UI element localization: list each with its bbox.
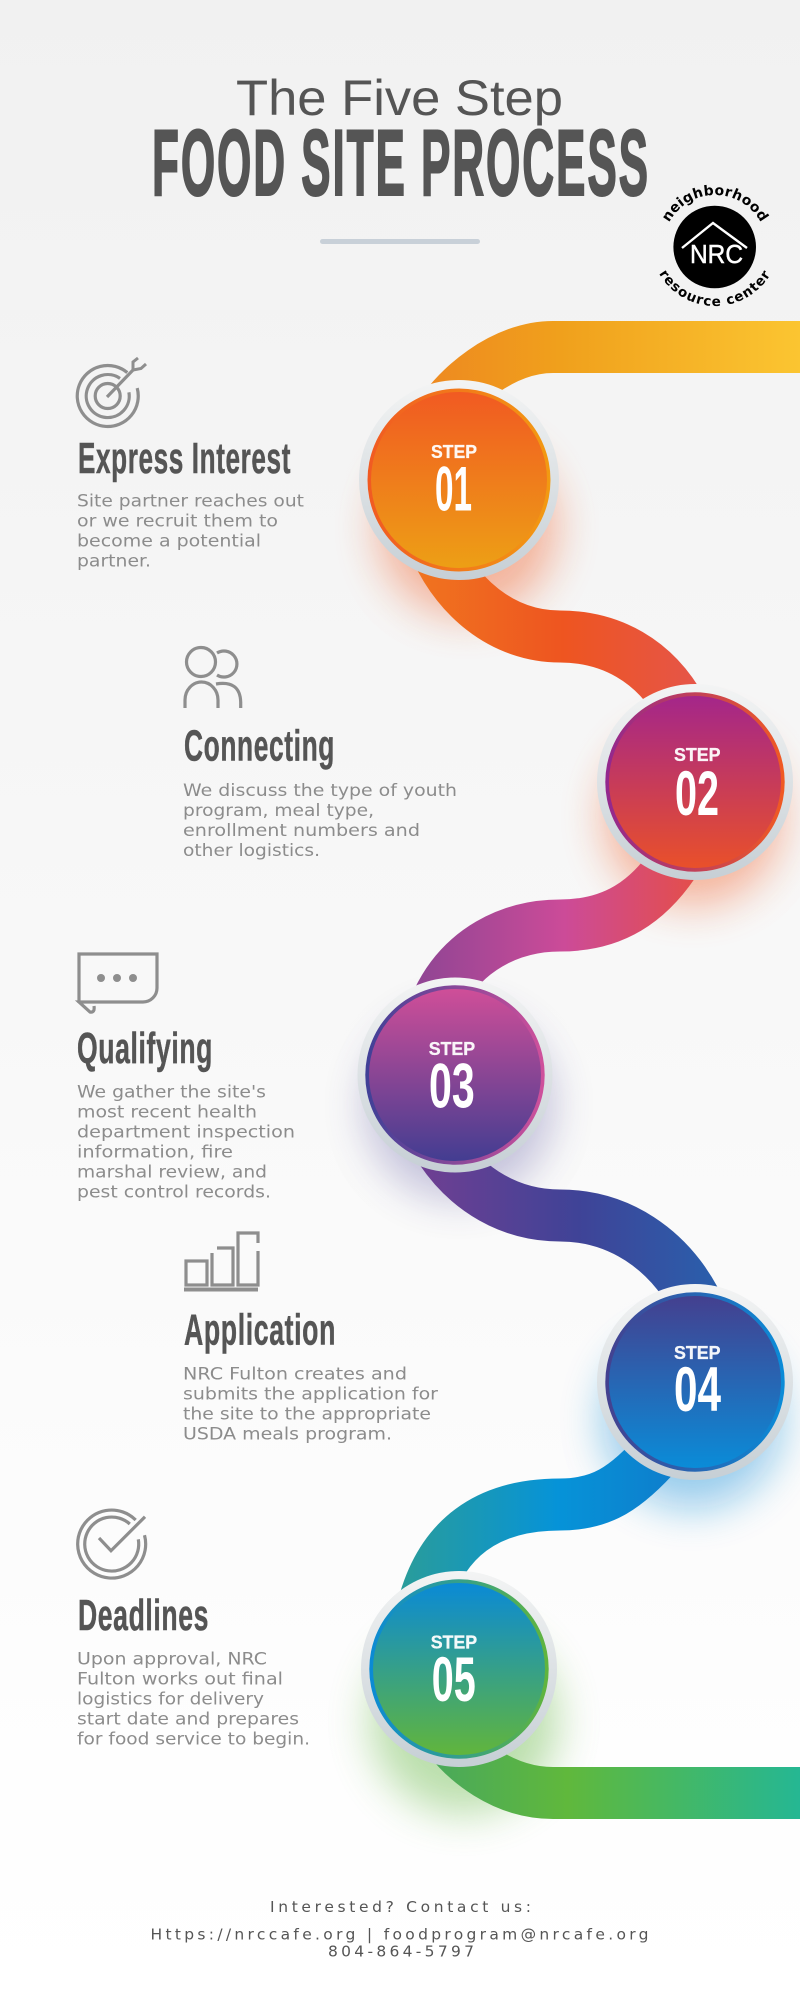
step 5 circle: STEP <box>431 1632 477 1652</box>
step 4 circle: STEP <box>674 1343 720 1363</box>
heading: Qualifying <box>77 1024 213 1073</box>
body text: We gather the site's <box>77 1082 266 1101</box>
body text: We discuss the type of youth <box>183 781 457 800</box>
body text: start date and prepares <box>77 1710 299 1729</box>
step 3 circle: STEP <box>429 1039 475 1059</box>
heading: Express Interest <box>78 434 291 483</box>
panel: express interest <box>77 358 305 571</box>
title <box>152 70 650 215</box>
body text <box>77 492 305 571</box>
body text: other logistics. <box>183 841 320 860</box>
logo: neighborhood resource center: neighborhood <box>663 184 770 222</box>
footer: contact details: Interested? Contact us: <box>270 1898 531 1916</box>
panel: connecting <box>183 648 457 860</box>
ribbon: step 5 exit <box>436 1720 800 1793</box>
step 3 circle: 03 <box>429 1052 475 1122</box>
winding ribbon <box>425 347 800 1793</box>
icon: two people <box>185 648 241 708</box>
heading: Application <box>184 1305 336 1354</box>
heading: Connecting <box>184 722 335 771</box>
body text: the site to the appropriate <box>183 1404 431 1423</box>
glow shadows under the step circles <box>365 437 783 1814</box>
body text <box>183 1364 438 1443</box>
logo: neighborhood resource center <box>660 184 770 306</box>
footer: contact details: Https://nrccafe.org | foodprogram@nrcafe.org <box>150 1926 648 1944</box>
body text: Site partner reaches out <box>77 492 305 511</box>
ribbon: step 4 to step 5 <box>425 1450 660 1600</box>
body text: enrollment numbers and <box>183 821 420 840</box>
logo: neighborhood resource center: NRC <box>690 239 743 269</box>
step 2 circle: 02 <box>675 759 719 829</box>
body text: Upon approval, NRC <box>77 1650 267 1669</box>
ribbon: entry to step 1 <box>430 347 800 430</box>
panel: deadlines <box>77 1510 310 1749</box>
body text <box>183 781 457 860</box>
ribbon: step 1 to step 2 <box>428 530 682 710</box>
body text: for food service to begin. <box>77 1730 310 1749</box>
footer: contact details <box>150 1898 648 1960</box>
body text: NRC Fulton creates and <box>183 1364 407 1383</box>
icon: bar chart <box>184 1233 258 1290</box>
body text <box>77 1650 310 1749</box>
body text: information, fire <box>77 1142 233 1161</box>
step 1 circle: 01 <box>435 454 472 524</box>
step 4 circle: 04 <box>674 1355 721 1425</box>
step 5 circle <box>361 1571 557 1767</box>
title divider <box>320 239 480 244</box>
panel: application <box>183 1233 438 1443</box>
body text: most recent health <box>77 1102 257 1121</box>
step 3 circle <box>358 978 552 1172</box>
body text: become a potential <box>77 532 261 551</box>
step 4 circle <box>597 1284 793 1480</box>
body text: program, meal type, <box>183 801 374 820</box>
body text: or we recruit them to <box>77 512 278 531</box>
icon: target with arrow <box>77 358 146 427</box>
step 1 circle: STEP <box>431 442 477 462</box>
heading: Deadlines <box>78 1591 209 1640</box>
step 2 circle <box>597 684 793 880</box>
step 1 circle <box>359 380 559 580</box>
ribbon: step 3 to step 4 <box>441 1150 695 1300</box>
panel: qualifying <box>77 954 295 1201</box>
body text <box>77 1082 295 1201</box>
body text: partner. <box>77 552 151 571</box>
body text: USDA meals program. <box>183 1424 392 1443</box>
icon: check in circle <box>78 1510 146 1578</box>
step 5 circle: 05 <box>432 1645 476 1715</box>
body text: logistics for delivery <box>77 1690 264 1709</box>
logo: neighborhood resource center: resource center <box>660 270 769 306</box>
title: The Five Step <box>236 70 563 126</box>
body text: department inspection <box>77 1122 295 1141</box>
ribbon: step 2 to step 3 <box>438 850 682 1000</box>
body text: pest control records. <box>77 1182 271 1201</box>
step 2 circle: STEP <box>674 745 720 765</box>
footer: contact details: 804-864-5797 <box>328 1942 474 1960</box>
body text: marshal review, and <box>77 1162 267 1181</box>
body text: Fulton works out final <box>77 1670 283 1689</box>
body text: submits the application for <box>183 1384 438 1403</box>
icon: chat bubble <box>79 954 157 1012</box>
